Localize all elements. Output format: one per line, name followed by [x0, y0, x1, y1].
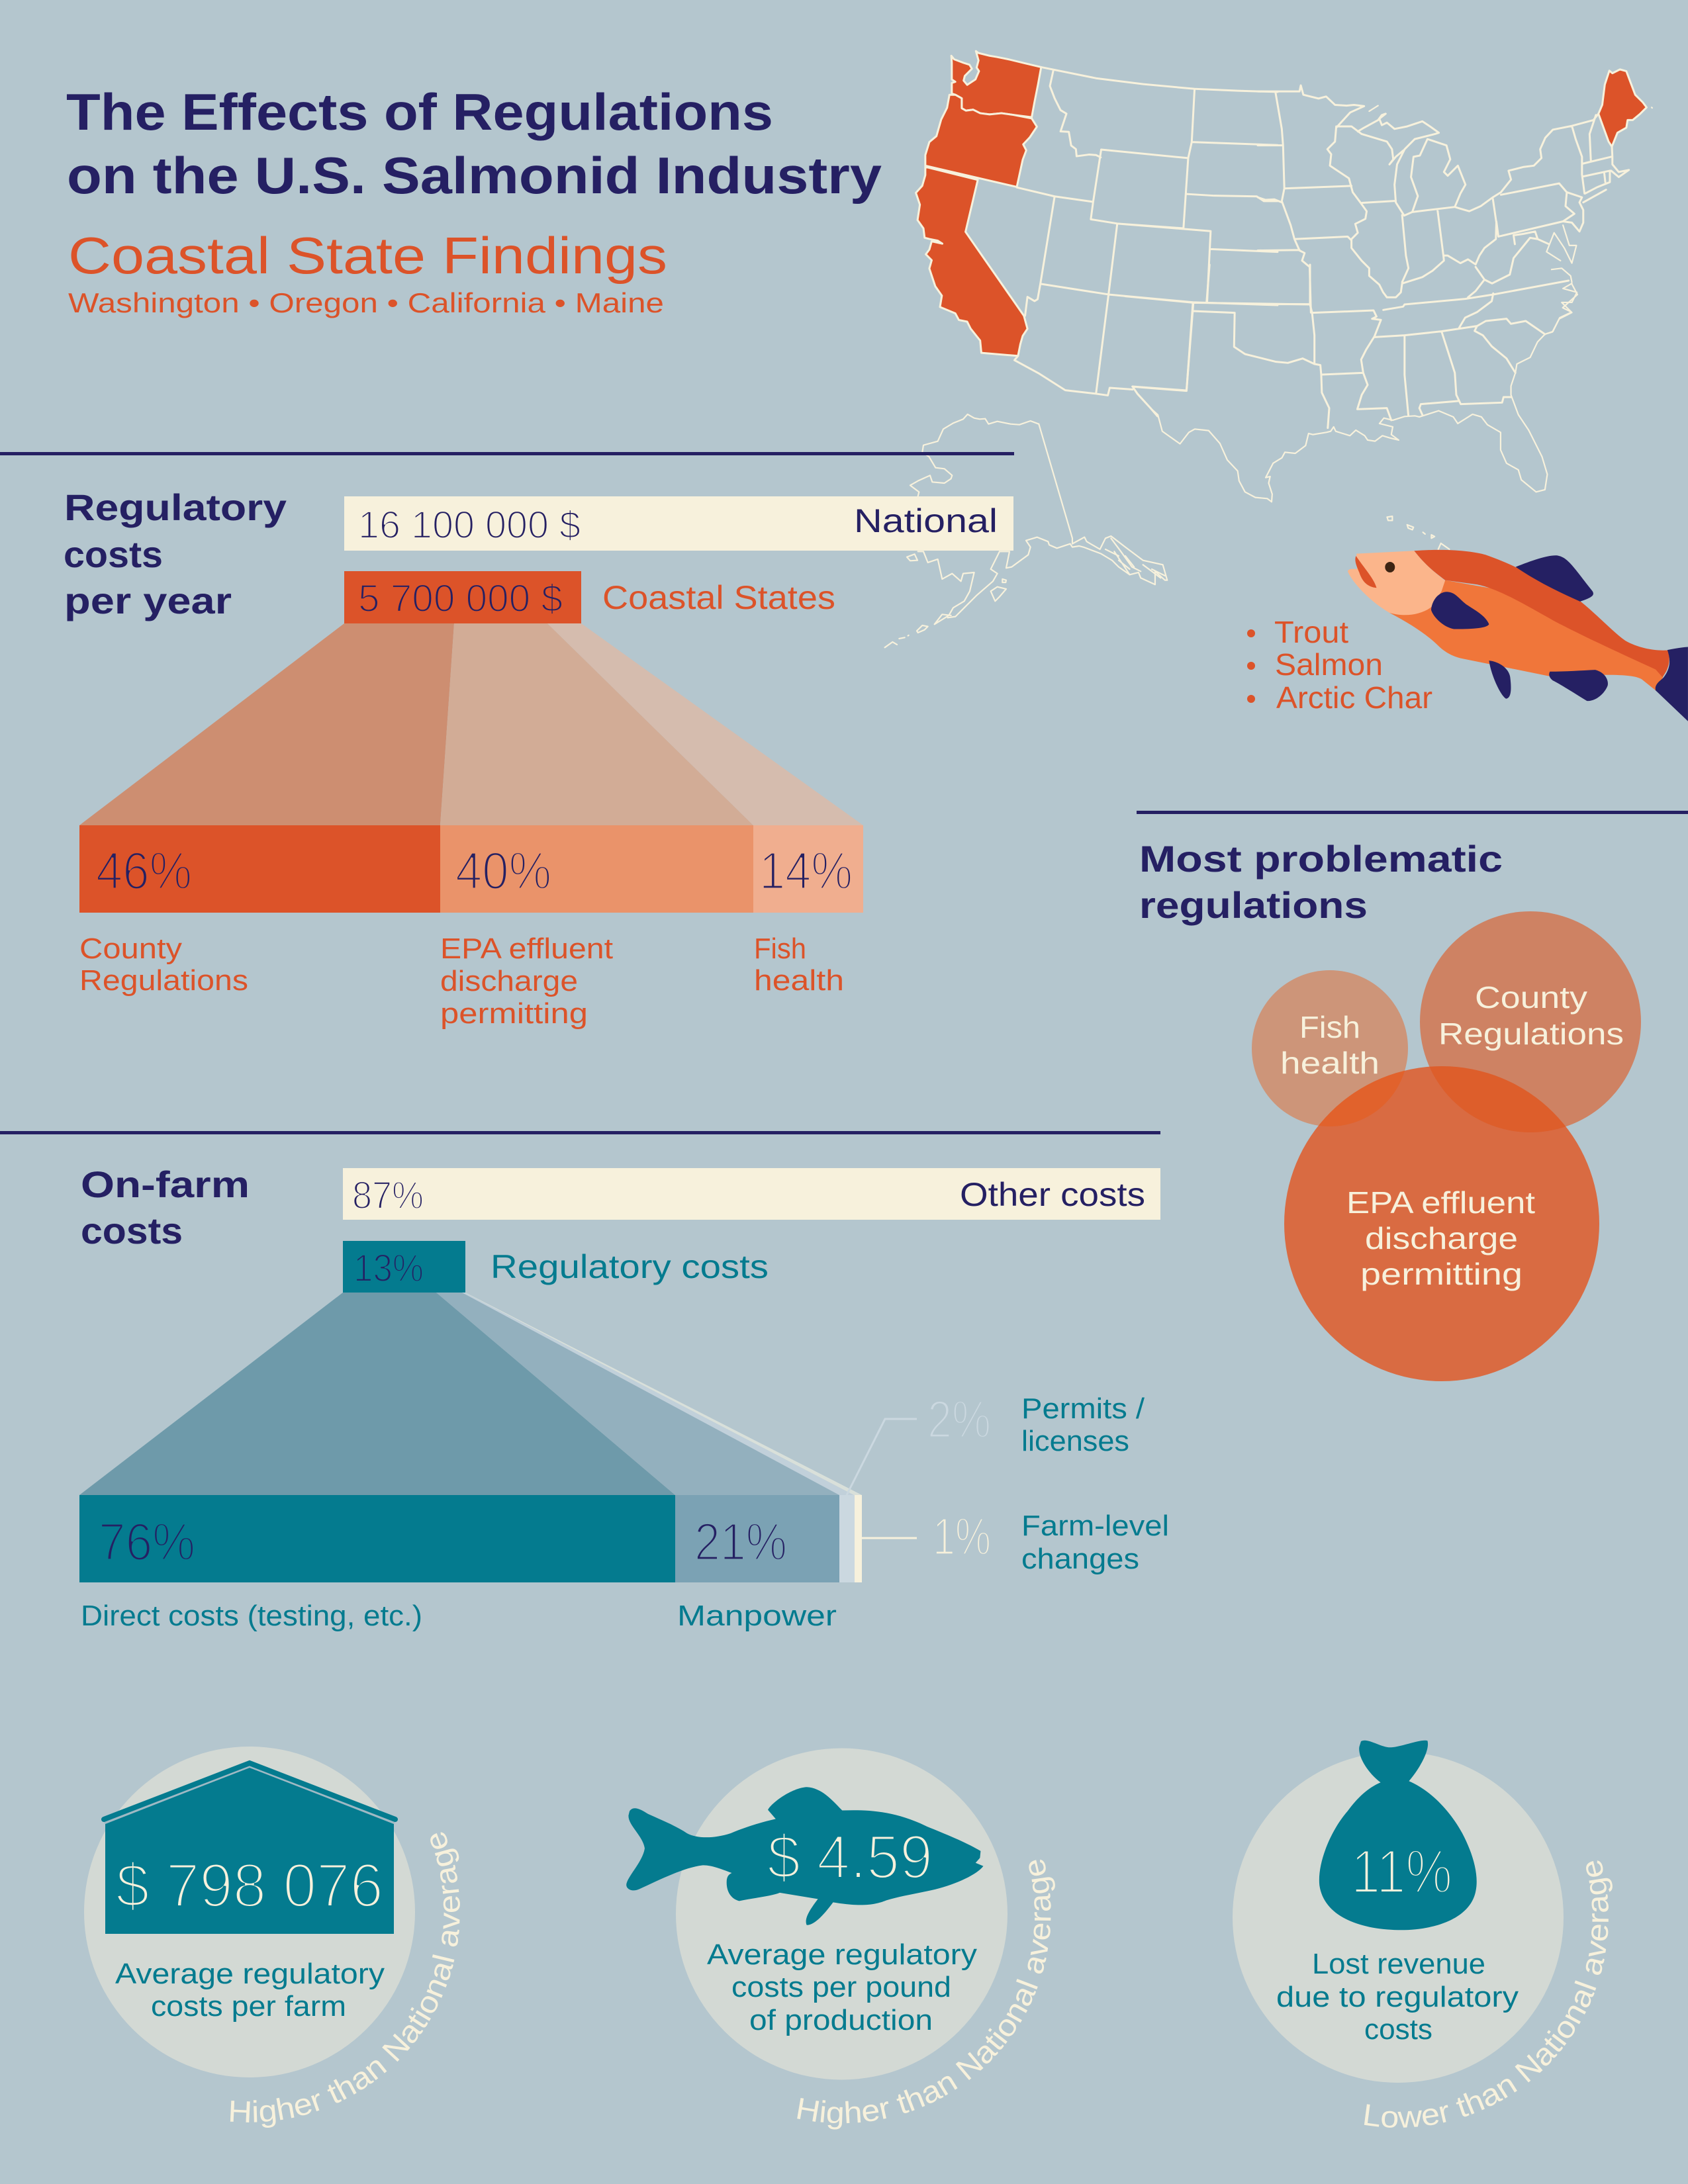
stacked bar: 46% [96, 841, 192, 900]
bar: other costs: Other costs [960, 1176, 1145, 1213]
description: costs [1364, 2013, 1432, 2046]
funnel [79, 623, 863, 825]
segment labels: County [79, 933, 182, 965]
venn labels: discharge [1365, 1221, 1518, 1255]
venn circles [1252, 911, 1641, 1381]
callout: permits: 2% [927, 1390, 991, 1449]
heading: per year [64, 580, 232, 621]
bar: coastal states: 5 700 000 $ [358, 577, 563, 620]
segment labels: Regulations [79, 964, 248, 997]
callout: permits [847, 1390, 1145, 1495]
fish fins [1431, 555, 1688, 721]
species list: Salmon [1275, 647, 1383, 682]
bar: regulatory costs: Regulatory costs [491, 1248, 769, 1285]
heading: Regulatory [64, 486, 287, 528]
segment labels: permitting [440, 997, 588, 1030]
segment labels: discharge [440, 965, 578, 997]
heading: Most problematic [1139, 838, 1503, 880]
fish back [1414, 550, 1669, 677]
map: western states [916, 51, 1278, 416]
description [1276, 1948, 1519, 2046]
value: $ 798 076 [116, 1850, 383, 1920]
state borders: west [1014, 67, 1278, 416]
fish mouth [1355, 556, 1376, 588]
venn labels: permitting [1360, 1257, 1523, 1291]
species list: Arctic Char [1276, 680, 1432, 715]
map: Alaska outline [885, 414, 1167, 647]
stacked bar: 21% [694, 1512, 787, 1571]
fish body [1389, 580, 1669, 692]
state: Oregon [925, 95, 1037, 187]
bar: coastal states [344, 571, 835, 623]
description: costs per farm [151, 1990, 346, 2023]
venn labels: Fish [1299, 1010, 1360, 1044]
bar: other costs [343, 1168, 1160, 1220]
funnel [79, 1293, 862, 1495]
segment labels: Fish [754, 933, 806, 965]
species list [1247, 615, 1432, 715]
description: Average regulatory [707, 1938, 977, 1971]
icon: barn [104, 1763, 395, 1934]
curved label: Lower than National average [1364, 1860, 1613, 2128]
value: $ 4.59 [767, 1822, 933, 1891]
fish head [1348, 551, 1445, 615]
icon: fish silhouette [626, 1787, 983, 1925]
map: Hawaii [1387, 516, 1449, 549]
description: due to regulatory [1276, 1981, 1519, 2013]
segment labels [79, 933, 844, 1030]
icon: money bag [1319, 1741, 1477, 1930]
subtitle: Coastal State Findings [68, 226, 667, 285]
callout: permits: Permits / [1021, 1392, 1145, 1425]
state: Washington [951, 51, 1041, 117]
title [66, 83, 882, 205]
bar: regulatory costs: 13% [353, 1247, 424, 1290]
venn labels: County [1475, 980, 1587, 1015]
stacked bar: 40% [455, 841, 551, 900]
segment labels: health [754, 964, 844, 997]
stat: cost per farm [84, 1747, 460, 2128]
callout: farm-level changes: changes [1021, 1543, 1139, 1575]
segment labels: EPA effluent [440, 933, 613, 965]
stat: lost revenue [1233, 1741, 1613, 2128]
title: on the U.S. Salmonid Industry [67, 146, 882, 205]
state borders: east [1258, 85, 1629, 312]
heading: regulations [1139, 884, 1368, 926]
bar: national: National [854, 502, 998, 539]
venn labels: Regulations [1438, 1017, 1624, 1051]
panel: on-farm costs [0, 1131, 1169, 1632]
title: The Effects of Regulations [66, 83, 773, 141]
callout: permits: licenses [1021, 1425, 1129, 1457]
callout: farm-level changes: 1% [933, 1507, 991, 1566]
heading: On-farm [81, 1163, 250, 1205]
callout: farm-level changes [862, 1507, 1169, 1575]
value: 11% [1351, 1837, 1452, 1906]
description: Lost revenue [1312, 1948, 1485, 1980]
bar: national: 16 100 000 $ [358, 504, 581, 547]
heading [1139, 838, 1503, 926]
bar: regulatory costs [343, 1241, 769, 1293]
state list: Washington • Oregon • California • Maine [68, 287, 664, 318]
curved label: Higher than National average [230, 1832, 460, 2128]
venn labels: EPA effluent [1346, 1185, 1535, 1220]
description: Average regulatory [115, 1958, 385, 1990]
stacked bar [79, 825, 863, 913]
stacked bar [79, 1495, 862, 1582]
heading [81, 1163, 250, 1251]
map: eastern states [1258, 69, 1652, 334]
bar: national [344, 496, 1013, 551]
heading: costs [64, 533, 163, 575]
segment labels: Manpower [677, 1600, 837, 1632]
segment labels [81, 1600, 837, 1632]
state: California [916, 167, 1027, 356]
bar: coastal states: Coastal States [602, 579, 835, 616]
panel: regulatory costs per year [0, 452, 1014, 1030]
curved label: Higher than National average [797, 1860, 1055, 2130]
heading [64, 486, 287, 621]
venn labels: health [1280, 1046, 1380, 1080]
map: southern states [1125, 265, 1577, 502]
segment labels: Direct costs (testing, etc.) [81, 1600, 422, 1632]
stat: cost per pound [626, 1749, 1055, 2130]
fish eye [1385, 562, 1395, 572]
venn labels [1280, 980, 1624, 1291]
description: of production [749, 2004, 933, 2036]
illustration: salmon [1348, 550, 1688, 721]
bar: other costs: 87% [352, 1174, 424, 1217]
heading: costs [81, 1210, 183, 1251]
state: Maine [1599, 69, 1646, 147]
description [115, 1958, 385, 2023]
stacked bar: 14% [759, 841, 853, 900]
description: costs per pound [731, 1971, 951, 2003]
description [707, 1938, 977, 2036]
species list: Trout [1274, 615, 1348, 649]
panel: most problematic regulations [1137, 811, 1688, 1381]
callout: farm-level changes: Farm-level [1021, 1510, 1169, 1542]
stacked bar: 76% [99, 1512, 195, 1571]
